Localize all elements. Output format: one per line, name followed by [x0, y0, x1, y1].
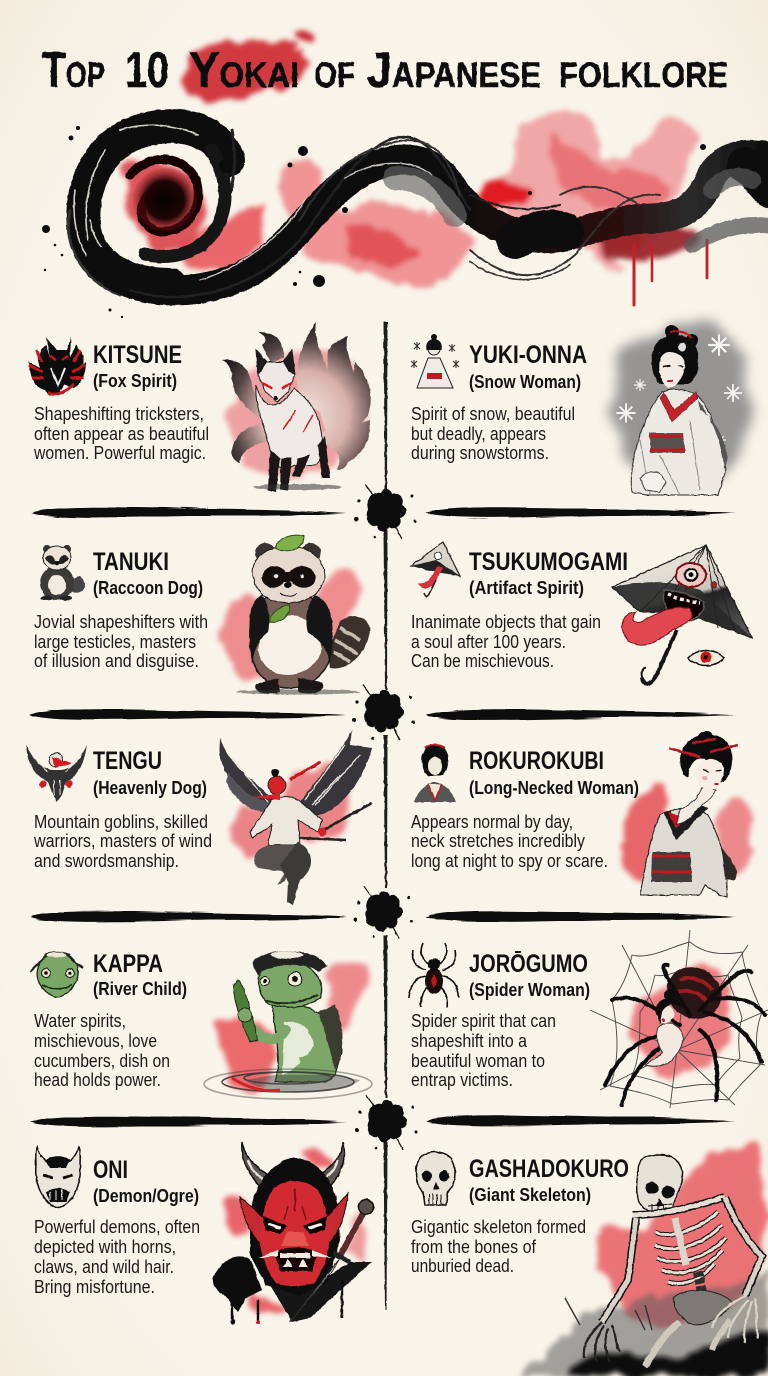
description: entrap victims. [411, 1070, 513, 1090]
panel: Kitsune [29, 322, 371, 492]
description: Spider spirit that can [411, 1011, 556, 1031]
description: Spirit of snow, beautiful [411, 404, 575, 424]
description: Shapeshifting tricksters, [34, 404, 204, 424]
heading: (Artifact Spirit) [469, 577, 584, 598]
panel: Tanuki [34, 535, 370, 694]
hero ink specks [42, 126, 706, 318]
central dividers and ink splats [30, 322, 736, 1310]
description [34, 612, 208, 671]
panel: Gashadokuro [411, 1142, 768, 1376]
icon: raccoon dog [40, 545, 85, 600]
panel: Kappa [30, 950, 372, 1099]
heading: (Raccoon Dog) [93, 577, 203, 598]
title text: folklore [559, 42, 728, 98]
description: of illusion and disguise. [34, 651, 199, 671]
description: large testicles, masters [34, 632, 196, 652]
description: a soul after 100 years. [411, 632, 566, 652]
description: beautiful woman to [411, 1051, 545, 1071]
panel: Tsukumogami [411, 542, 752, 684]
description: Gigantic skeleton formed [411, 1217, 586, 1237]
description: Bring misfortune. [34, 1277, 155, 1297]
illustration: tanuki [222, 535, 370, 694]
description: during snowstorms. [411, 443, 549, 463]
illustration: winged tengu [220, 730, 372, 905]
heading [469, 747, 639, 798]
illustration: kappa in water [204, 951, 372, 1099]
description: and swordsmanship. [34, 851, 179, 871]
hero spiral and wave strokes [68, 125, 768, 297]
title text: of [314, 42, 355, 98]
description: Can be mischievous. [411, 651, 554, 671]
description: often appear as beautiful [34, 424, 209, 444]
description: claws, and wild hair. [34, 1257, 174, 1277]
description: Inanimate objects that gain [411, 612, 601, 632]
heading: ROKUROKUBI [469, 747, 604, 775]
heading [469, 1155, 629, 1205]
heading [469, 341, 587, 392]
heading: (Spider Woman) [469, 979, 590, 1000]
panel: Yuki-Onna [411, 325, 751, 495]
horizontal brush dividers [30, 507, 736, 1127]
icon: umbrella spirit [411, 542, 460, 596]
title red ink blot [183, 31, 314, 100]
heading [93, 950, 187, 999]
heading: (River Child) [93, 978, 187, 999]
panel: Tengu [26, 730, 372, 905]
panel: Jorogumo [409, 930, 768, 1108]
description: mischievous, love [34, 1031, 157, 1051]
icon: spider [409, 943, 459, 1007]
heading: (Heavenly Dog) [93, 777, 207, 798]
icon: oni mask [36, 1147, 80, 1208]
heading: TSUKUMOGAMI [469, 548, 628, 576]
description [34, 1217, 200, 1297]
icon: tengu with wings [26, 744, 87, 802]
hero ink swirl painting [42, 111, 768, 318]
illustration: red oni face [213, 1142, 374, 1325]
icon: long-necked woman [414, 745, 456, 802]
hero blood drips [634, 240, 707, 305]
illustration: umbrella yokai [612, 545, 752, 684]
description: warriors, masters of wind [33, 831, 212, 851]
heading [469, 950, 590, 1000]
icon: fox mask [29, 337, 86, 395]
ink splats [352, 484, 418, 1150]
heading: KAPPA [93, 950, 163, 978]
description: Mountain goblins, skilled [34, 812, 208, 832]
illustration: spider woman on web [590, 930, 768, 1108]
description: cucumbers, dish on [34, 1051, 170, 1071]
heading: (Demon/Ogre) [93, 1185, 199, 1206]
description [411, 612, 601, 671]
icon: kappa head [30, 952, 83, 997]
heading: (Fox Spirit) [93, 370, 177, 391]
title text [42, 42, 728, 98]
heading: JORŌGUMO [469, 950, 588, 978]
description [411, 404, 575, 463]
panel: Rokurokubi [411, 731, 752, 897]
description: depicted with horns, [34, 1237, 176, 1257]
heading: TENGU [93, 747, 162, 775]
description: Appears normal by day, [411, 812, 573, 832]
heading [93, 1156, 199, 1206]
heading: TANUKI [93, 548, 169, 576]
description: neck stretches incredibly [411, 831, 585, 851]
heading: (Snow Woman) [469, 371, 581, 392]
heading [93, 747, 207, 798]
description [34, 1011, 170, 1090]
panel: Oni [34, 1142, 374, 1325]
icon: snow woman [411, 334, 459, 388]
hero red washes [124, 111, 705, 287]
title text: 10 [125, 42, 169, 98]
heading: (Giant Skeleton) [469, 1184, 591, 1205]
heading: ONI [93, 1156, 128, 1184]
icon: skull [416, 1152, 455, 1205]
title text: Top [42, 42, 105, 98]
title text: Yokai [189, 42, 299, 98]
heading: (Long-Necked Woman) [469, 777, 639, 798]
title text: Japanese [367, 42, 541, 98]
vertical dividers [384, 322, 388, 1310]
heading [469, 548, 628, 598]
illustration: rokurokubi geisha [622, 731, 752, 897]
hero spiral core [133, 168, 197, 232]
description: Jovial shapeshifters with [34, 612, 208, 632]
illustration: snow woman [609, 325, 751, 495]
description: unburied dead. [411, 1256, 514, 1276]
title [42, 31, 728, 100]
illustration: giant skeleton [520, 1142, 768, 1376]
description: long at night to spy or scare. [411, 851, 608, 871]
description [411, 1217, 586, 1276]
heading [93, 548, 203, 598]
description: but deadly, appears [411, 424, 546, 444]
description: women. Powerful magic. [33, 443, 206, 463]
description [33, 812, 212, 871]
description: Water spirits, [34, 1011, 126, 1031]
description [411, 812, 608, 871]
description: shapeshift into a [411, 1031, 528, 1051]
heading: YUKI-ONNA [469, 341, 587, 369]
description [411, 1011, 556, 1090]
heading: GASHADOKURO [469, 1155, 629, 1183]
description: Powerful demons, often [34, 1217, 200, 1237]
description: head holds power. [34, 1070, 161, 1090]
heading [93, 341, 182, 391]
heading: KITSUNE [93, 341, 182, 369]
description [33, 404, 209, 463]
description: from the bones of [411, 1237, 537, 1257]
illustration: nine-tailed fox [222, 322, 371, 492]
